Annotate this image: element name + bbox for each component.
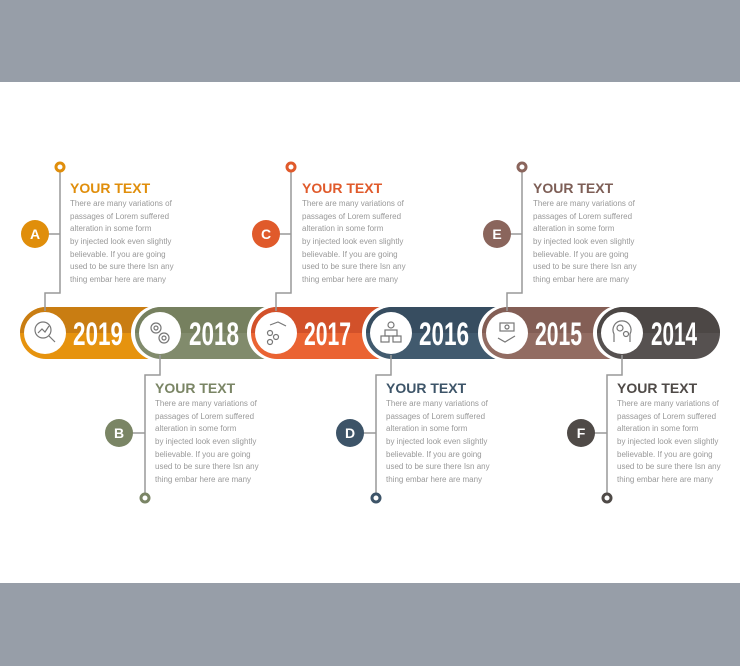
text block E <box>533 180 637 284</box>
timeline bar <box>18 305 722 361</box>
segment 2016: 2016 <box>419 316 469 352</box>
text block E: used to be sure there Isn any <box>533 262 637 271</box>
segment 2014: 2014 <box>651 316 697 352</box>
text block C: used to be sure there Isn any <box>302 262 406 271</box>
text block F: alteration in some form <box>617 424 699 433</box>
text block B: used to be sure there Isn any <box>155 462 259 471</box>
text block A: YOUR TEXT <box>70 180 151 196</box>
text block F: There are many variations of <box>617 399 720 408</box>
segment 2014 <box>593 305 722 361</box>
text block C: believable. If you are going <box>302 250 398 259</box>
text block F <box>617 380 721 484</box>
text block F: thing embar here are many <box>617 475 713 484</box>
text block B: There are many variations of <box>155 399 258 408</box>
letter badges: D <box>345 425 355 441</box>
text block D: used to be sure there Isn any <box>386 462 490 471</box>
text block A: thing embar here are many <box>70 275 166 284</box>
text block F: passages of Lorem suffered <box>617 412 716 421</box>
text block C: by injected look even slightly <box>302 237 403 246</box>
text block A <box>70 180 174 284</box>
text block D: by injected look even slightly <box>386 437 487 446</box>
text block D: believable. If you are going <box>386 450 482 459</box>
text block E: believable. If you are going <box>533 250 629 259</box>
letter badges: F <box>577 425 586 441</box>
text block E: There are many variations of <box>533 199 636 208</box>
text block E: YOUR TEXT <box>533 180 614 196</box>
segment 2016 <box>362 305 530 361</box>
marker circles <box>56 163 611 502</box>
text block B: believable. If you are going <box>155 450 251 459</box>
text block E: thing embar here are many <box>533 275 629 284</box>
text block C <box>302 180 406 284</box>
text block F: by injected look even slightly <box>617 437 718 446</box>
text block C: thing embar here are many <box>302 275 398 284</box>
text block D: thing embar here are many <box>386 475 482 484</box>
text block F: believable. If you are going <box>617 450 713 459</box>
icon: gears <box>151 323 169 343</box>
text block A: passages of Lorem suffered <box>70 212 169 221</box>
letter badges <box>21 220 595 447</box>
text block F: YOUR TEXT <box>617 380 698 396</box>
letter badges: A <box>30 226 40 242</box>
text block D <box>386 380 490 484</box>
segment 2015: 2015 <box>535 316 582 352</box>
text block A: There are many variations of <box>70 199 173 208</box>
text block D: passages of Lorem suffered <box>386 412 485 421</box>
text block B: YOUR TEXT <box>155 380 236 396</box>
letter badges: E <box>492 226 502 242</box>
text block A: by injected look even slightly <box>70 237 171 246</box>
icon: team <box>381 322 401 342</box>
segment 2018 <box>131 305 299 361</box>
text block D: YOUR TEXT <box>386 380 467 396</box>
letter badges: C <box>261 226 271 242</box>
text block A: used to be sure there Isn any <box>70 262 174 271</box>
text block C: YOUR TEXT <box>302 180 383 196</box>
text block C: There are many variations of <box>302 199 405 208</box>
segment 2017 <box>247 305 415 361</box>
text block B <box>155 380 259 484</box>
text block D: There are many variations of <box>386 399 489 408</box>
segment 2018: 2018 <box>189 316 239 352</box>
text block B: thing embar here are many <box>155 475 251 484</box>
icon: hand money <box>498 323 515 342</box>
segment 2019 <box>18 305 184 361</box>
top band <box>0 0 740 82</box>
segment 2015 <box>478 305 646 361</box>
connectors <box>45 171 622 494</box>
text block B: by injected look even slightly <box>155 437 256 446</box>
text block E: passages of Lorem suffered <box>533 212 632 221</box>
text block D: alteration in some form <box>386 424 468 433</box>
text block C: passages of Lorem suffered <box>302 212 401 221</box>
text block E: by injected look even slightly <box>533 237 634 246</box>
icon: hand coins <box>268 322 286 344</box>
bottom band <box>0 583 740 666</box>
text block C: alteration in some form <box>302 224 384 233</box>
text block F: used to be sure there Isn any <box>617 462 721 471</box>
icon: magnifier chart <box>35 322 55 342</box>
text block A: alteration in some form <box>70 224 152 233</box>
text block E: alteration in some form <box>533 224 615 233</box>
segment 2019: 2019 <box>73 316 123 352</box>
text block B: alteration in some form <box>155 424 237 433</box>
segment 2017: 2017 <box>304 316 351 352</box>
text block A: believable. If you are going <box>70 250 166 259</box>
icon: head gears <box>613 321 631 342</box>
letter badges: B <box>114 425 124 441</box>
text block B: passages of Lorem suffered <box>155 412 254 421</box>
